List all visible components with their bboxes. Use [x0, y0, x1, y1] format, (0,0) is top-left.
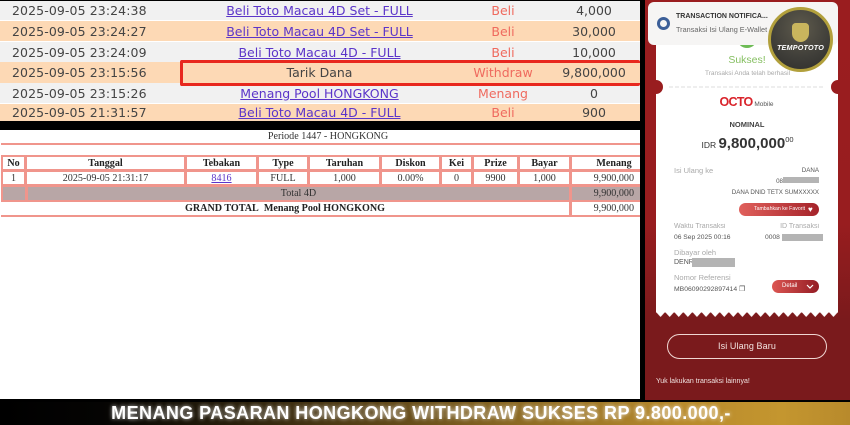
row: 23:15:56 withdrawal: Tarik Dana	[287, 65, 352, 80]
logo wordmark: TEMPOTOTO	[777, 43, 824, 52]
heading: period: Periode 1447 - HONGKONG	[268, 131, 388, 142]
table data row: 8416	[211, 172, 232, 184]
add to favourites button: ♥	[808, 205, 813, 214]
transaction time: Waktu Transaksi	[674, 223, 725, 230]
table header row: No	[7, 158, 20, 168]
row: 21:31:57 purchase: Beli Toto Macau 4D - FULL	[238, 105, 401, 120]
row: 23:24:38 purchase: 2025-09-05 23:24:38	[12, 3, 147, 18]
table header row: Menang	[596, 158, 632, 168]
row: 23:24:27 purchase: Beli Toto Macau 4D Set - FULL	[226, 24, 413, 38]
grand total row: GRAND TOTAL Menang Pool HONGKONG	[185, 203, 385, 214]
success heading: Sukses!	[728, 54, 766, 66]
recipient details: 08	[776, 178, 783, 185]
table data row: 1,000	[333, 172, 356, 184]
banner headline: MENANG PASARAN HONGKONG WITHDRAW SUKSES RP 9.800.000,-	[111, 403, 731, 423]
row: 23:24:38 purchase	[0, 1, 640, 20]
bank logo: OCTO Mobile	[719, 95, 774, 109]
row: 23:24:09 purchase: 10,000	[572, 44, 616, 60]
grand total row: 9,900,000	[594, 203, 634, 214]
add to favourites button: Tambahkan ke Favorit	[754, 206, 805, 212]
total 4D row: 9,900,000	[594, 188, 634, 199]
notification message: Transaksi Isi Ulang E-Wallet Anda	[676, 25, 786, 34]
table header row: Tebakan	[203, 158, 240, 168]
detail button: Detail	[782, 283, 797, 289]
row: 23:24:27 purchase: 2025-09-05 23:24:27	[12, 24, 147, 38]
table data row: FULL	[270, 172, 296, 184]
reference number value: MB06090292897414 ❐	[674, 286, 745, 293]
row: 23:24:09 purchase: 2025-09-05 23:24:09	[12, 44, 147, 60]
table header row: Prize	[484, 158, 507, 168]
new top-up button: Isi Ulang Baru	[718, 341, 776, 351]
recipient label: Isi Ulang ke	[674, 166, 713, 175]
table data row: 1,000	[533, 172, 556, 184]
new top-up button	[667, 334, 827, 359]
row: 23:24:27 purchase: Beli	[491, 24, 515, 38]
row: 23:15:26 winnings: Menang	[478, 86, 528, 100]
payer label: Dibayar oleh	[674, 248, 716, 257]
row: 23:24:09 purchase	[0, 42, 640, 62]
receipt ticket	[656, 39, 838, 317]
table data row: 2025-09-05 21:31:17	[63, 172, 148, 184]
panel: mobile banking receipt	[645, 0, 850, 400]
detail button	[772, 280, 819, 293]
footer prompt: Yuk lakukan transaksi lainnya!	[656, 378, 750, 385]
table data row	[1, 171, 640, 185]
row: 23:15:26 winnings: 0	[590, 86, 598, 100]
table header row: Taruhan	[326, 158, 363, 168]
row: 23:24:27 purchase	[0, 21, 640, 41]
table data row: 9900	[485, 172, 506, 184]
row: 23:15:56 withdrawal	[0, 62, 640, 83]
table data row: 0	[454, 172, 459, 184]
row: 23:24:38 purchase: Beli Toto Macau 4D Set - FULL	[226, 3, 413, 18]
notification title: TRANSACTION NOTIFICA...	[676, 13, 768, 20]
row: 23:24:09 purchase: Beli Toto Macau 4D - FULL	[238, 44, 401, 60]
row: 23:24:38 purchase: Beli	[491, 3, 515, 18]
table data row: 0.00%	[397, 172, 424, 184]
row: 23:15:56 withdrawal: 2025-09-05 23:15:56	[12, 65, 147, 80]
total 4D row	[1, 186, 640, 200]
transaction ID label: ID Transaksi	[780, 223, 819, 230]
row: 23:24:38 purchase: 4,000	[576, 3, 612, 18]
notification icon	[657, 17, 670, 30]
row: 21:31:57 purchase	[0, 104, 640, 121]
row: 23:15:26 winnings: 2025-09-05 23:15:26	[12, 86, 147, 100]
table header row: Type	[272, 158, 294, 168]
add to favourites button	[739, 203, 819, 216]
grand total row	[1, 202, 640, 217]
table header row: Tanggal	[88, 158, 123, 168]
panel: transaction history table	[0, 1, 640, 121]
table header row: Bayar	[531, 158, 558, 168]
recipient details	[732, 167, 819, 196]
payer value: DENR	[674, 259, 694, 266]
transaction ID value: 0008	[765, 234, 780, 241]
table header row: Kei	[449, 158, 464, 168]
success icon	[737, 28, 757, 48]
logo emblem	[792, 23, 809, 42]
recipient details: DANA	[802, 167, 819, 174]
panel: winnings detail table	[0, 130, 640, 399]
nominal label: NOMINAL	[730, 120, 764, 129]
red highlight box around withdrawal	[180, 60, 640, 86]
heading: period	[1, 130, 640, 145]
nominal amount: IDR 9,800,00000	[701, 135, 794, 152]
chevron icon	[806, 284, 814, 289]
transaction time value: 06 Sep 2025 00:16	[674, 234, 731, 241]
success message: Transaksi Anda telah berhasil	[705, 70, 790, 77]
row: 23:15:26 winnings	[0, 83, 640, 103]
row: 23:24:09 purchase: Beli	[491, 44, 515, 60]
row: 23:24:27 purchase: 30,000	[572, 24, 616, 38]
transaction ID value	[765, 234, 823, 241]
row: 21:31:57 purchase: Beli	[491, 105, 515, 120]
row: 21:31:57 purchase: 900	[582, 105, 606, 120]
payer value	[674, 258, 735, 267]
notification banner	[648, 2, 838, 45]
row: 23:15:26 winnings: Menang Pool HONGKONG	[240, 86, 399, 100]
row: 23:15:56 withdrawal: Withdraw	[473, 65, 533, 80]
table data row: 1	[11, 172, 16, 184]
table header row: Diskon	[395, 158, 426, 168]
table header row	[1, 155, 640, 170]
table data row: 9,900,000	[594, 172, 634, 184]
total 4D row: Total 4D	[281, 188, 316, 199]
row: 23:15:56 withdrawal: 9,800,000	[562, 65, 626, 80]
phone background side bands	[645, 0, 850, 320]
recipient details: DANA DNID TETX SUMXXXXX	[732, 189, 819, 196]
row: 21:31:57 purchase: 2025-09-05 21:31:57	[12, 105, 147, 120]
banner: footer caption	[0, 402, 850, 425]
logo: Tempototo badge	[768, 7, 833, 72]
reference number label: Nomor Referensi	[674, 273, 731, 282]
